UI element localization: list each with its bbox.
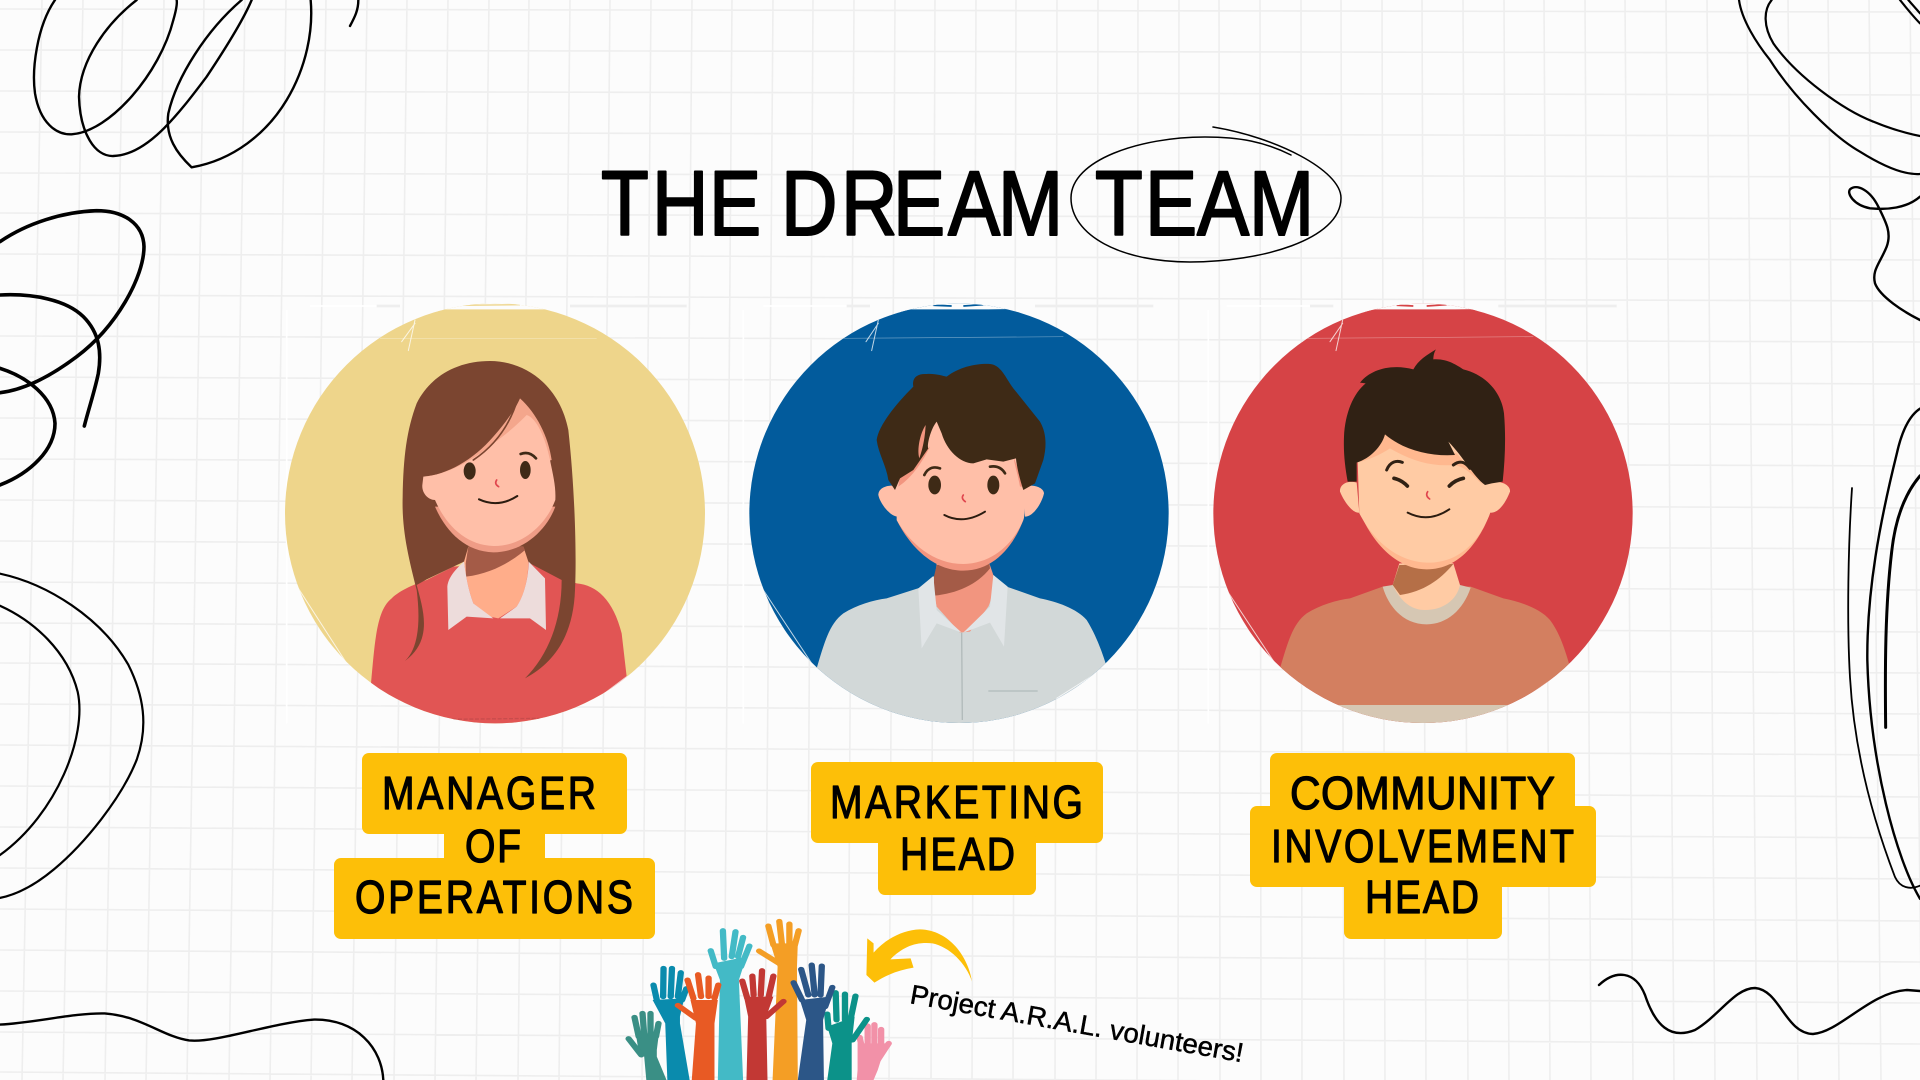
caption: project volunteers: Project A.R.A.L. volunteers! xyxy=(908,979,1246,1068)
label: community involvement head: HEAD xyxy=(1365,872,1479,924)
label: community involvement head xyxy=(1250,753,1596,939)
label: community involvement head: COMMUNITY xyxy=(1290,768,1555,819)
title xyxy=(601,153,1314,255)
scribble: top left xyxy=(34,0,358,167)
panel: marketing head portrait xyxy=(742,304,1169,723)
label: marketing head: HEAD xyxy=(900,829,1015,881)
title: THE DREAM xyxy=(601,153,1063,255)
panel: manager of operations portrait xyxy=(285,303,705,724)
label: community involvement head: INVOLVEMENT xyxy=(1271,821,1574,873)
arrow: curved yellow arrow pointing to hands xyxy=(866,929,972,983)
scribble: lower right xyxy=(1848,409,1920,899)
label: manager of operations xyxy=(334,753,655,939)
illustration: volunteer raised hands xyxy=(629,921,889,1080)
label: manager of operations: OPERATIONS xyxy=(355,872,633,924)
panel: community involvement head portrait xyxy=(1208,304,1633,723)
scribble: bottom right wave xyxy=(1599,975,1920,1034)
label: manager of operations: MANAGER xyxy=(382,768,596,820)
scribble: middle left xyxy=(0,211,144,485)
hand-drawn ellipse around TEAM xyxy=(1071,127,1341,262)
label: marketing head: MARKETING xyxy=(830,777,1083,829)
label: marketing head xyxy=(811,762,1103,895)
scribble: top right xyxy=(1739,0,1920,320)
scribble: lower left xyxy=(0,574,383,1080)
label: manager of operations: OF xyxy=(465,821,521,873)
title: TEAM xyxy=(1095,153,1314,255)
